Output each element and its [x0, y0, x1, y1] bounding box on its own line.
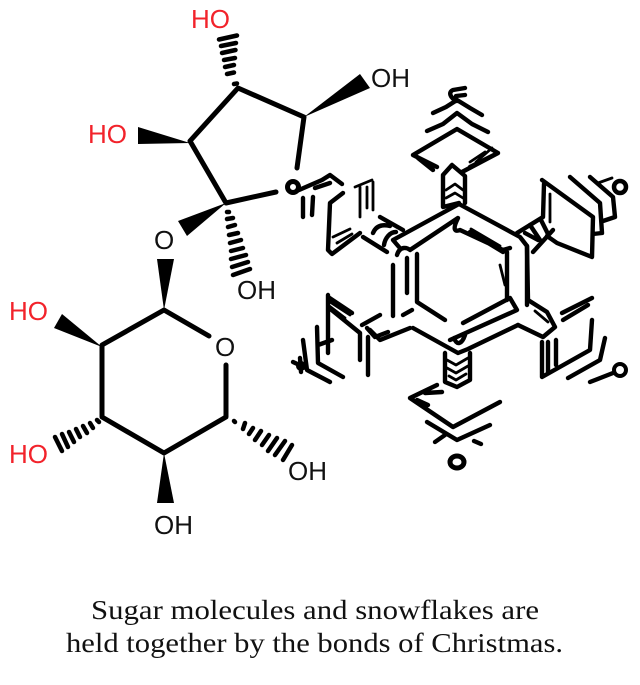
labels: red HO	[9, 4, 230, 469]
wedge: glycosidic to six ring	[157, 259, 174, 310]
diagram: sugar molecule	[9, 4, 410, 540]
wedge: bottom OH	[157, 453, 174, 503]
caption	[66, 595, 563, 658]
six-membered ring bonds	[102, 310, 226, 453]
wedge: lower glycosidic	[178, 203, 226, 236]
hashed bond: lower OH	[227, 212, 250, 275]
wedge: upper right OH	[304, 74, 370, 117]
wedge: upper left HO on six ring	[54, 314, 102, 347]
snowflake top arm	[413, 88, 498, 207]
snowflake bottom arm	[410, 353, 500, 468]
labels: black OH and ring oxygens: OH	[154, 510, 193, 540]
caption: Sugar molecules and snowflakes are	[91, 595, 539, 625]
snowflake central hexagon	[393, 204, 528, 353]
labels: black OH and ring oxygens: OH	[371, 63, 410, 93]
snowflake upper left arm	[288, 175, 403, 254]
hashed bond: lower right OH	[234, 421, 292, 460]
labels: red HO: HO	[191, 4, 230, 34]
five-membered ring bonds	[190, 88, 304, 203]
snowflake lower right arm	[518, 298, 626, 382]
snowflake upper right arm	[517, 177, 626, 257]
labels: black OH and ring oxygens: OH	[237, 275, 276, 305]
hashed bond: lower left HO	[55, 420, 99, 451]
labels: black OH and ring oxygens: O	[215, 332, 235, 362]
labels: red HO: HO	[9, 296, 48, 326]
snowflake lower left arm	[293, 295, 410, 382]
caption: held together by the bonds of Christmas.	[66, 628, 563, 658]
wedge: left HO	[138, 127, 190, 144]
labels: black OH and ring oxygens: O	[154, 225, 174, 255]
labels: black OH and ring oxygens	[154, 63, 410, 540]
labels: black OH and ring oxygens: OH	[288, 456, 327, 486]
hashed bond: top HO	[219, 36, 237, 84]
diagram: snowflake	[288, 88, 626, 468]
labels: red HO: HO	[88, 119, 127, 149]
labels: red HO: HO	[9, 439, 48, 469]
